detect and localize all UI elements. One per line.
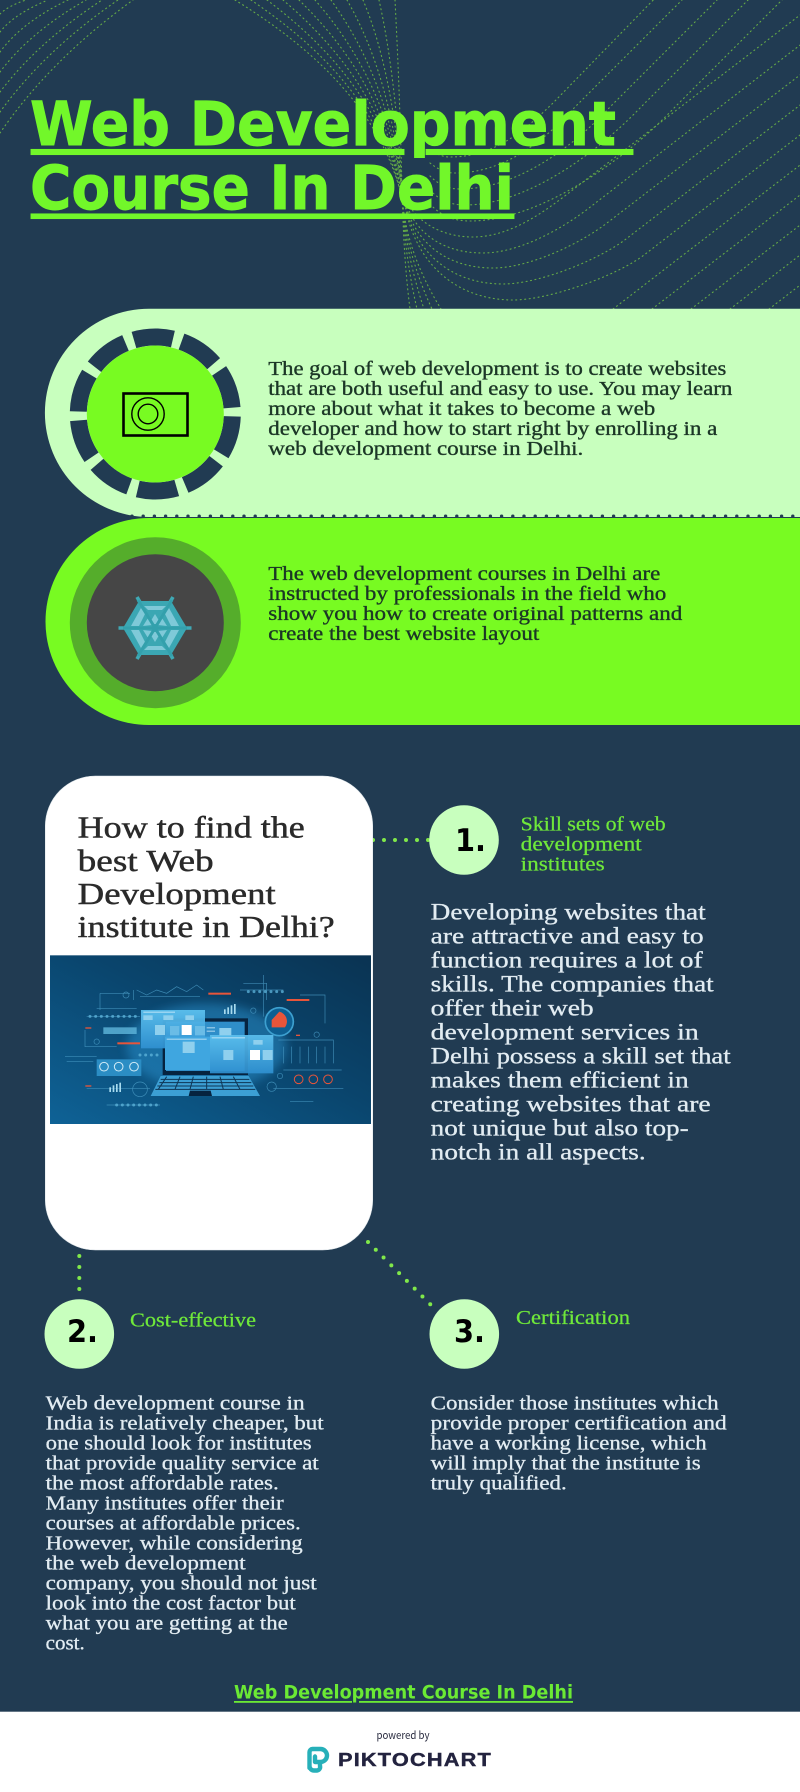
footer: piktochart branding: PIKTOCHART <box>338 1749 492 1770</box>
text: cost-effective body: the web development <box>46 1552 246 1574</box>
title: Course In Delhi <box>30 153 514 224</box>
panel: courses in Delhi <box>45 518 800 725</box>
connector: card to step 2 <box>77 1256 81 1300</box>
text: goal paragraph: developer and how to start right by enrolling in a <box>268 418 717 440</box>
panel: website goal <box>45 309 800 517</box>
icon: piktochart logo <box>310 1749 327 1770</box>
text: cost-effective body: company, you should not just <box>46 1572 317 1594</box>
text: cost-effective body <box>46 1392 324 1654</box>
text: cost-effective body: the most affordable rates. <box>46 1472 279 1494</box>
step 2 badge <box>45 1299 114 1369</box>
heading: how to find: How to find the <box>78 810 305 845</box>
text: cost-effective body: one should look for institutes <box>46 1432 312 1454</box>
text: goal paragraph: web development course in Delhi. <box>268 438 583 460</box>
text: courses paragraph: create the best website layout <box>268 623 540 645</box>
text: cost-effective body: that provide quality service at <box>46 1452 319 1474</box>
step 3 badge <box>430 1299 499 1369</box>
text: goal paragraph <box>268 358 732 460</box>
text: cost-effective body: Web development course in <box>46 1392 305 1414</box>
text: skill sets body: makes them efficient in <box>431 1067 689 1092</box>
heading: skill sets: institutes <box>521 854 605 876</box>
heading: certification: Certification <box>516 1307 630 1329</box>
text: goal paragraph: The goal of web development is to create websites <box>268 358 727 380</box>
title: Web Development <box>30 89 616 160</box>
text: certification body: truly qualified. <box>431 1472 567 1494</box>
text: goal paragraph: that are both useful and easy to use. You may learn <box>268 378 732 400</box>
heading: how to find: institute in Delhi? <box>78 909 335 944</box>
icon: spider web hexagon <box>70 537 241 708</box>
text: cost-effective body: Many institutes offer their <box>46 1492 284 1514</box>
text: goal paragraph: more about what it takes to become a web <box>268 398 655 420</box>
heading: skill sets <box>521 814 666 876</box>
footer: piktochart branding: powered by <box>376 1727 430 1743</box>
text: skill sets body: creating websites that are <box>431 1091 711 1116</box>
text: certification body: will imply that the institute is <box>431 1452 701 1474</box>
text: skill sets body: notch in all aspects. <box>431 1140 646 1164</box>
text: certification body: have a working license, which <box>431 1432 707 1454</box>
text: skill sets body: function requires a lot of <box>431 947 703 972</box>
text: skill sets body: Delhi possess a skill set that <box>431 1043 731 1068</box>
text: cost-effective body: look into the cost factor but <box>46 1592 296 1614</box>
text: cost-effective body: India is relatively cheaper, but <box>46 1412 324 1434</box>
text: certification body: Consider those institutes which <box>431 1392 719 1414</box>
step 1 badge <box>429 805 499 875</box>
text: courses paragraph: show you how to create original patterns and <box>268 603 682 625</box>
text: cost-effective body: cost. <box>46 1632 85 1654</box>
text: certification body: provide proper certification and <box>431 1412 727 1434</box>
step 2 badge: 2. <box>67 1314 98 1350</box>
heading: skill sets: Skill sets of web <box>521 814 666 836</box>
text: cost-effective body: courses at affordable prices. <box>46 1512 301 1534</box>
text: skill sets body: not unique but also top- <box>431 1115 689 1140</box>
title <box>30 89 633 224</box>
heading: how to find: Development <box>78 876 276 911</box>
text: courses paragraph: instructed by professionals in the field who <box>268 583 666 605</box>
heading: how to find <box>78 810 335 944</box>
panel: white heading card <box>45 776 373 1250</box>
connector: card to step 1 <box>373 838 430 842</box>
step 3 badge: 3. <box>454 1314 485 1350</box>
image: laptop with dashboards <box>50 955 371 1124</box>
text: certification body <box>431 1392 727 1494</box>
heading: how to find: best Web <box>78 843 214 878</box>
text: cost-effective body: However, while considering <box>46 1532 303 1554</box>
heading: skill sets: development <box>521 834 642 856</box>
text: skill sets body: are attractive and easy to <box>431 923 704 948</box>
text: courses paragraph: The web development courses in Delhi are <box>268 563 660 585</box>
icon: gear ring with camera frame <box>76 335 235 493</box>
text: cost-effective body: what you are getting at the <box>46 1612 288 1634</box>
text: skill sets body: offer their web <box>431 995 594 1020</box>
text: skill sets body: skills. The companies that <box>431 971 714 996</box>
text: skill sets body: development services in <box>431 1019 699 1044</box>
text: skill sets body: Developing websites that <box>431 899 706 924</box>
heading: cost-effective: Cost-effective <box>130 1310 256 1332</box>
footer link: Web Development Course In Delhi <box>234 1682 573 1703</box>
footer: piktochart branding <box>0 1712 800 1792</box>
connector: card to step 3 <box>368 1242 431 1305</box>
step 1 badge: 1. <box>455 823 486 859</box>
text: skill sets body <box>431 899 731 1164</box>
text: courses paragraph <box>268 563 682 645</box>
